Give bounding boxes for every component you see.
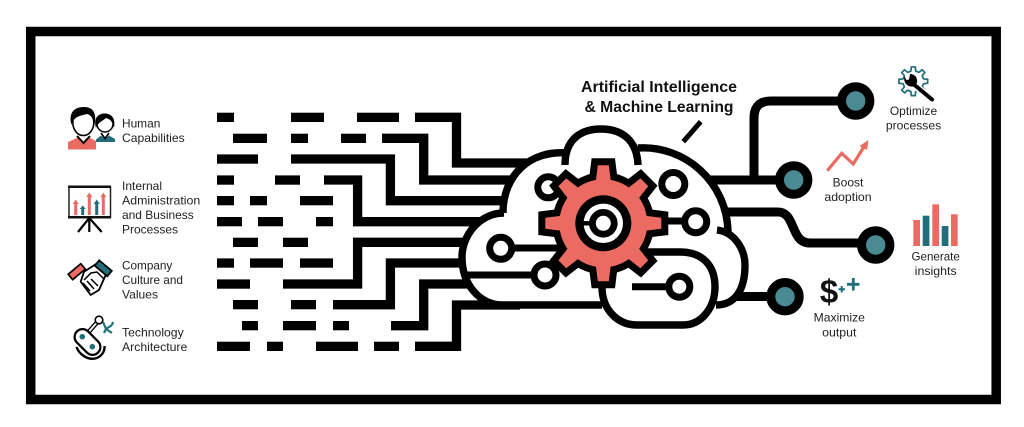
label: technology architecture	[122, 326, 188, 354]
label: optimize processes: processes	[886, 118, 941, 132]
label: company culture	[122, 258, 183, 302]
label: boost adoption: Boost	[833, 176, 864, 190]
label: optimize processes: Optimize	[890, 104, 937, 118]
label: internal administration: and Business	[122, 208, 194, 222]
label: internal administration	[122, 179, 200, 236]
icon: handshake	[68, 260, 112, 295]
label: maximize output: output	[822, 326, 857, 340]
label: optimize processes	[886, 104, 941, 132]
label: technology architecture: Architecture	[122, 340, 188, 354]
cloud brain	[462, 129, 745, 325]
icon: people	[68, 107, 115, 150]
label: maximize output	[814, 311, 865, 340]
title: Artificial Intelligence	[581, 79, 737, 96]
label: internal administration: Processes	[122, 222, 178, 236]
label: company culture: Values	[122, 288, 158, 302]
input wires into cloud	[283, 117, 530, 346]
label: generate insights: insights	[915, 264, 957, 278]
icon: dollar plus: $	[820, 273, 838, 310]
title: & Machine Learning	[584, 99, 734, 116]
title pointer	[683, 122, 701, 142]
label: human capabilities: Capabilities	[122, 131, 185, 145]
label: internal administration: Administration	[122, 194, 200, 208]
data dashes	[217, 113, 399, 351]
label: human capabilities	[122, 117, 185, 145]
label: technology architecture: Technology	[122, 326, 184, 340]
label: generate insights	[912, 250, 960, 278]
icon: dollar plus	[820, 273, 860, 310]
central gear	[545, 165, 661, 281]
icon: robot arm	[76, 316, 113, 359]
icon: bar chart	[913, 204, 958, 246]
icon: presentation chart	[68, 186, 111, 232]
output nodes	[771, 87, 890, 311]
label: boost adoption	[824, 176, 872, 204]
label: maximize output: Maximize	[814, 311, 865, 325]
output wires	[700, 101, 876, 296]
title	[581, 79, 737, 116]
icon: gear and wrench	[899, 67, 932, 100]
label: company culture: Culture and	[122, 273, 183, 287]
label: human capabilities: Human	[122, 117, 160, 131]
label: boost adoption: adoption	[824, 190, 872, 204]
icon: growth arrow	[827, 140, 868, 171]
label: internal administration: Internal	[122, 179, 162, 193]
cloud circuit nodes	[463, 172, 707, 297]
label: company culture: Company	[122, 258, 172, 272]
label: generate insights: Generate	[912, 250, 960, 264]
